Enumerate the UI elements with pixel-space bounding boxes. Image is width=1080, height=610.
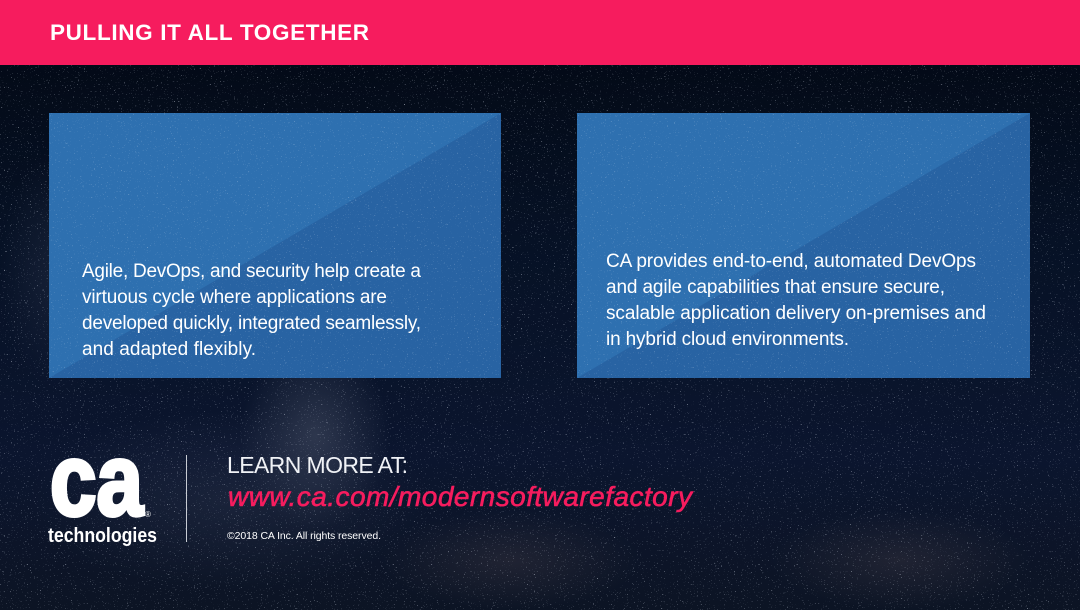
title: PULLING IT ALL TOGETHER xyxy=(50,20,369,45)
right panel text: in hybrid cloud environments. xyxy=(606,329,849,350)
left panel text xyxy=(82,261,421,360)
copyright: ©2018 CA Inc. All rights reserved. xyxy=(227,530,381,542)
url: www.ca.com/modernsoftwarefactory xyxy=(228,481,694,512)
learn more label: LEARN MORE AT: xyxy=(227,452,408,478)
logo: CA Technologies: ® xyxy=(145,510,151,519)
left panel text: Agile, DevOps, and security help create a xyxy=(82,261,421,282)
right panel text: scalable application delivery on-premises and xyxy=(606,303,986,324)
header bar xyxy=(0,0,1080,65)
panel: right xyxy=(577,113,1030,378)
left panel text: developed quickly, integrated seamlessly, xyxy=(82,313,421,334)
left panel text: and adapted flexibly. xyxy=(82,339,256,360)
right panel text xyxy=(606,251,986,350)
right panel text: CA provides end-to-end, automated DevOps xyxy=(606,251,976,272)
logo: CA Technologies: ca xyxy=(50,423,144,537)
call to action xyxy=(227,452,694,542)
left panel text: virtuous cycle where applications are xyxy=(82,287,387,308)
divider xyxy=(186,455,187,542)
logo: CA Technologies: technologies xyxy=(48,525,157,547)
panel: left xyxy=(49,113,501,378)
right panel text: and agile capabilities that ensure secure, xyxy=(606,277,945,298)
